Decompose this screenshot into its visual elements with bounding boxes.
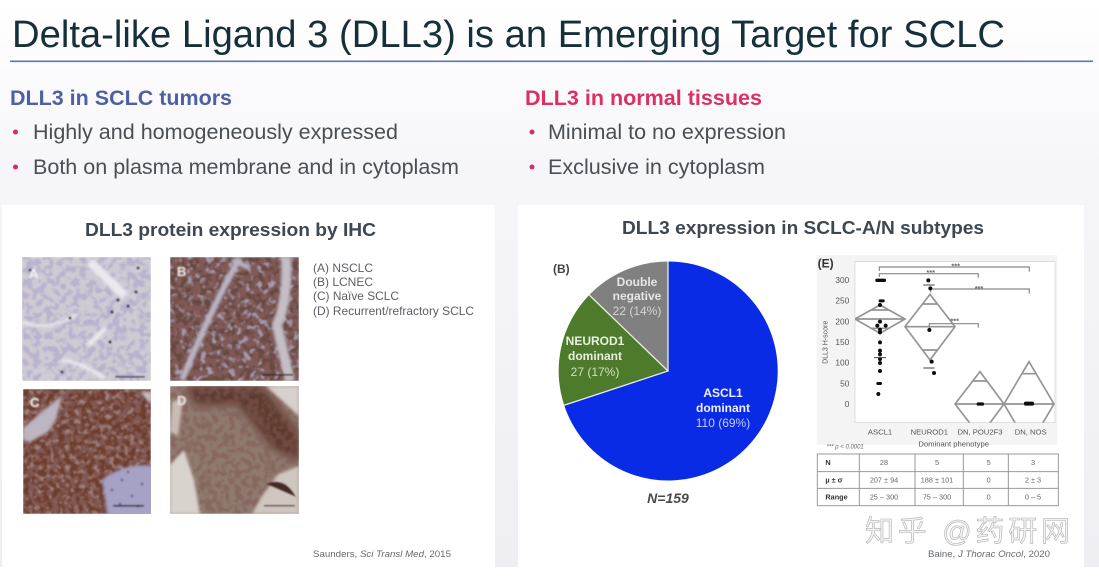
x axis: NEUROD1 [911,428,948,437]
chart: DLL3 H-score by dominant phenotype [817,255,1058,506]
micrograph B: LCNEC: B [177,264,186,279]
chart: DLL3 H-score by dominant phenotype: *** [975,284,983,293]
y axis: 300 [835,275,850,285]
panel: SCLC-A/N subtypes [518,205,1084,567]
watermark: 知乎 @药研网 [865,515,1070,548]
data table: 207 ± 94 [870,475,898,484]
data table: 3 [1031,458,1035,467]
legend: IHC tumor types [313,261,474,318]
y axis: 200 [835,316,850,326]
significance brackets [879,267,1029,329]
pie label: ASCL1: dominant [696,401,750,415]
bullet list: normal tissues: Minimal to no expression [548,120,786,144]
y axis: 250 [835,296,850,306]
micrograph A: NSCLC [22,257,151,381]
legend: IHC tumor types: (C) Naïve SCLC [313,289,399,303]
section: DLL3 in normal tissues [525,86,786,179]
chart: DLL3 H-score by dominant phenotype: *** [926,268,935,277]
data table: 2 ± 3 [1025,475,1041,484]
data table: 5 [987,458,991,467]
bullet list: normal tissues: Exclusive in cytoplasm [548,155,765,179]
micrograph B: LCNEC [170,257,299,381]
micrograph C: Naive SCLC: C [30,395,40,410]
chart: DLL3 H-score by dominant phenotype: DLL3 H-score [822,321,829,364]
data table: 25 – 300 [870,493,898,502]
sample size: N=159 [647,490,689,506]
y axis: 0 [845,399,850,409]
y axis: 50 [840,378,850,388]
data table: Range [825,493,848,502]
pie label: ASCL1 [696,386,750,430]
citation: Saunders: Saunders, Sci Transl Med, 2015 [313,549,451,560]
y axis [835,275,850,409]
x axis: DN, NOS [1015,428,1047,437]
chart: DLL3 H-score by dominant phenotype: *** [950,317,959,326]
bullet list: tumors [13,120,459,179]
data table: 75 – 300 [923,493,951,502]
pie label: ASCL1: ASCL1 [703,386,743,400]
pie label: double negative [613,275,662,318]
bullet list: tumors: Both on plasma membrane and in cytoplasm [33,155,459,179]
chart: DLL3 H-score by dominant phenotype: *** p < 0.0001 [827,444,864,450]
data table: µ ± σ [825,475,843,484]
x axis [868,428,1047,437]
pie label: double negative: Double [617,275,658,289]
micrograph D: Recurrent/refractory SCLC [170,386,299,514]
panel heading: subtypes: DLL3 expression in SCLC-A/N subtypes [622,218,984,238]
pie label: NEUROD1: dominant [568,349,622,363]
data table: 28 [880,458,888,467]
citation: Baine: Baine, J Thorac Oncol, 2020 [928,549,1050,560]
pie label: double negative: negative [613,289,662,303]
micrograph A: NSCLC: A [29,266,39,281]
pie chart: dominant phenotype [553,261,778,506]
section: DLL3 in SCLC tumors [10,86,459,179]
title: Delta-like Ligand 3 (DLL3) is an Emerging Target for SCLC [12,14,1005,56]
pie label: double negative: 22 (14%) [613,304,661,318]
y axis: 100 [835,358,850,368]
pie label: NEUROD1 [566,334,625,379]
data table [817,454,1058,506]
panel: IHC protein expression [2,205,495,567]
legend: IHC tumor types: (D) Recurrent/refractory SCLC [313,304,474,318]
data table: 0 [987,493,991,502]
chart: DLL3 H-score by dominant phenotype: (E) [818,257,834,271]
data table: 5 [935,458,939,467]
bullet list: normal tissues [530,120,786,179]
chart: DLL3 H-score by dominant phenotype: Dominant phenotype [918,439,989,448]
pie label: ASCL1: 110 (69%) [696,416,750,430]
pie chart: dominant phenotype: (B) [553,262,570,276]
x axis: ASCL1 [868,428,892,437]
data points [875,278,1034,406]
panel heading: IHC: DLL3 protein expression by IHC [85,220,376,240]
bullet list: tumors: Highly and homogeneously expressed [33,120,398,144]
data table: 0 – 5 [1025,493,1041,502]
chart: DLL3 H-score by dominant phenotype: *** [951,261,960,270]
heading: tumors: DLL3 in SCLC tumors [10,86,232,110]
x axis: DN, POU2F3 [957,428,1003,437]
legend: IHC tumor types: (A) NSCLC [313,261,373,275]
y axis: 150 [835,337,850,347]
micrograph C: Naive SCLC [23,389,152,516]
data table: 0 [987,475,991,484]
heading: normal tissues: DLL3 in normal tissues [525,86,762,110]
data table: 188 ± 101 [921,475,953,484]
pie label: NEUROD1: 27 (17%) [571,365,619,379]
data table: N [825,458,831,467]
diamonds [855,293,1055,423]
legend: IHC tumor types: (B) LCNEC [313,275,373,289]
pie label: NEUROD1: NEUROD1 [566,334,625,348]
micrograph D: Recurrent/refractory SCLC: D [177,393,186,408]
